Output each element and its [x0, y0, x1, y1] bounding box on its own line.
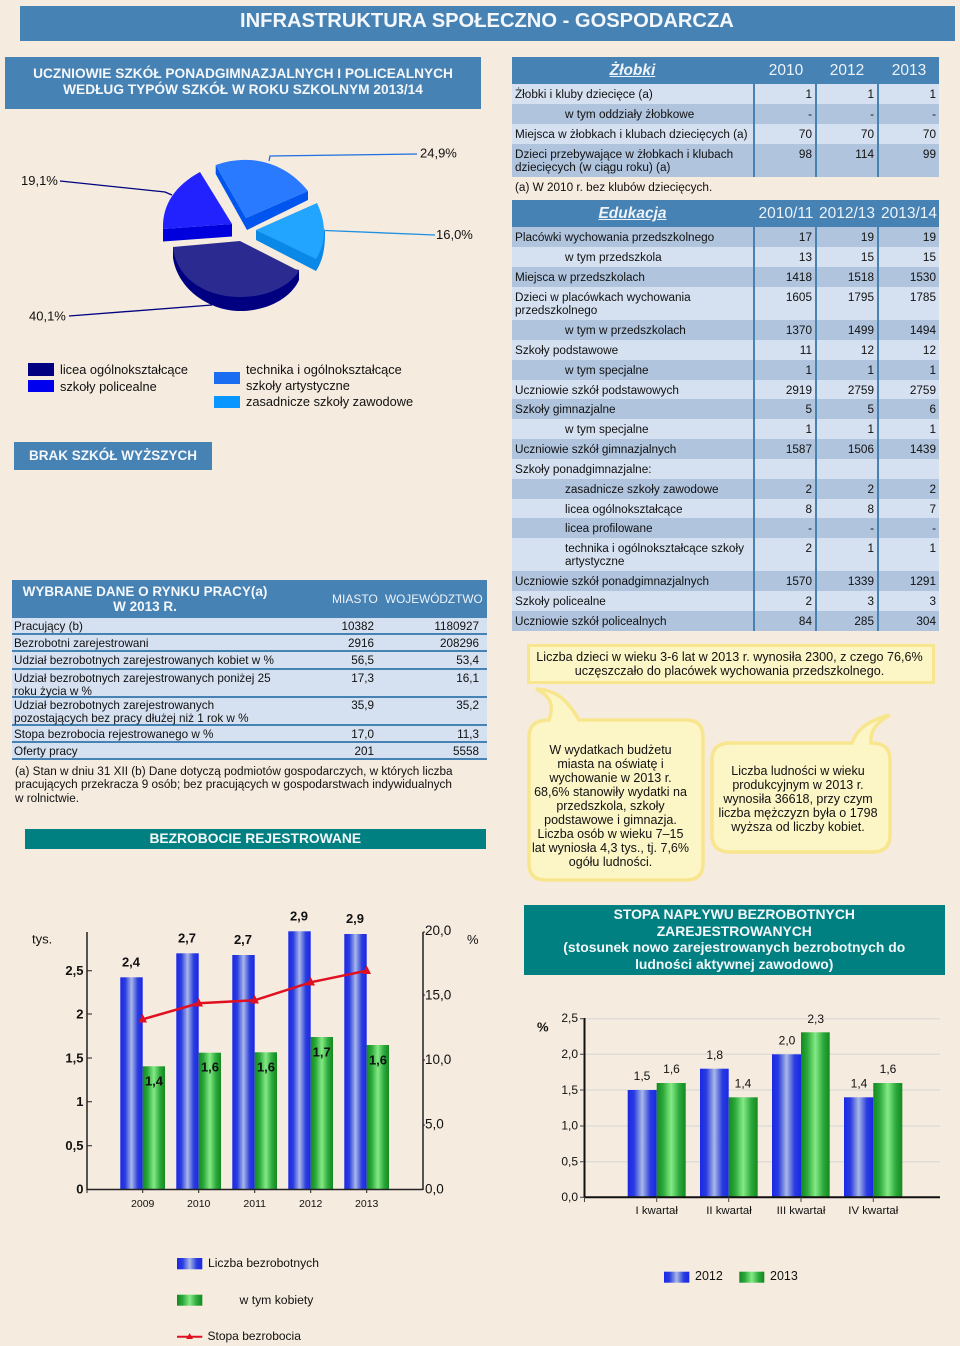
slice: zasadnicze 16,0% [256, 203, 473, 271]
table: education: 2 [805, 595, 812, 608]
left axis labels [65, 963, 84, 1196]
axis labels: 2,5 [561, 1011, 578, 1025]
data labels: 2,9 [290, 908, 308, 924]
footnote: nurseries: (a) W 2010 r. bez klubów dziecięcych. [515, 181, 712, 194]
table: education: 3 [867, 595, 874, 608]
table: education: 1339 [848, 575, 874, 588]
heading: students by school type [5, 57, 481, 109]
callout: education budget: wychowanie w 2013 r. [549, 771, 672, 785]
bars: of which women [143, 1037, 389, 1190]
table: nurseries: Dzieci przebywające w żłobkach i klubach dziecięcych (w ciągu roku) (a) [515, 148, 733, 174]
table: nurseries: 98 [799, 148, 812, 161]
table: labour market data: 11,3 [457, 728, 479, 741]
table: labour market data: 35,9 [351, 699, 374, 712]
table: education: Szkoły podstawowe [515, 344, 618, 357]
table: education: 1587 [786, 443, 812, 456]
table: education: 1499 [848, 324, 874, 337]
table: education: 1494 [910, 324, 936, 337]
table header: 2012/13 [819, 205, 875, 222]
table: education: - [932, 522, 936, 535]
data labels: 1,6 [663, 1062, 680, 1076]
axis labels: 0,0 [561, 1190, 578, 1204]
slice: licea 40,1%: 40,1% [29, 308, 66, 324]
legend: school types: szkoły policealne [60, 379, 157, 394]
legend: 2012 and 2013 [664, 1269, 798, 1283]
table header: MIASTO [332, 592, 378, 606]
table: nurseries: 114 [855, 148, 874, 161]
legend: registered unemployment: w tym kobiety [238, 1293, 314, 1307]
table: education: 2 [805, 483, 812, 496]
table: labour market data [12, 580, 487, 760]
right axis labels: 10,0 [425, 1052, 451, 1067]
legend: school types: szkoły artystyczne [246, 378, 350, 393]
table: nurseries: 70 [861, 128, 874, 141]
table: education: 8 [867, 503, 874, 516]
table header [12, 580, 487, 618]
table: education: 1 [929, 542, 936, 555]
data labels: 1,6 [201, 1060, 219, 1074]
table: nurseries: - [932, 108, 936, 121]
callout: working-age population: liczba mężczyzn była o 1798 [718, 806, 878, 820]
table: labour market data: 201 [354, 745, 374, 758]
quarter labels [635, 1205, 899, 1217]
quarter labels: I kwartał [635, 1205, 678, 1217]
data labels [634, 1012, 897, 1090]
chart: unemployment inflow rate [537, 1011, 940, 1217]
table header [512, 200, 939, 227]
table: education: Szkoły gimnazjalne [515, 403, 616, 416]
quarter labels: III kwartał [777, 1205, 826, 1217]
right axis labels [425, 923, 451, 1196]
slice: licea 40,1% [29, 241, 299, 324]
data labels: 1,7 [313, 1044, 331, 1060]
data labels: 1,6 [257, 1060, 275, 1074]
table: education: 285 [854, 615, 874, 628]
table header: 2013/14 [881, 205, 937, 222]
table: labour market data: 16,1 [456, 672, 479, 685]
table: education: Szkoły ponadgimnazjalne: [515, 463, 652, 476]
bars: 2012 [628, 1054, 873, 1197]
table: labour market data: Bezrobotni zarejestrowani [14, 637, 148, 650]
table: education: 15 [861, 251, 874, 264]
pie chart: students by school type [21, 146, 473, 324]
table: education: 1 [929, 423, 936, 436]
axis unit: % [537, 1020, 549, 1034]
table: education: licea ogólnokształcące [565, 503, 683, 516]
left axis labels: 0 [76, 1182, 84, 1196]
table: education: 11 [800, 344, 812, 357]
table: education: w tym w przedszkolach [565, 324, 686, 337]
table: education: 2 [805, 542, 812, 555]
data labels [122, 908, 387, 1088]
axes [87, 932, 425, 1193]
table: education: 19 [861, 231, 874, 244]
legend: school types: zasadnicze szkoły zawodowe [246, 394, 413, 409]
table: labour market data: 53,4 [456, 654, 479, 667]
callout: children aged 3-6: Liczba dzieci w wieku 3-6 lat w 2013 r. wynosiła 2300, z czego 76,6% [536, 650, 923, 664]
data labels: 1,5 [634, 1069, 651, 1083]
legend: school types: technika i ogólnokształcące [246, 362, 402, 377]
legend: 2012 and 2013: 2013 [770, 1269, 798, 1283]
axis labels: 1,5 [561, 1083, 578, 1097]
data labels: 1,6 [369, 1052, 387, 1068]
table: education: 5 [867, 403, 874, 416]
table: labour market data: Udział bezrobotnych zarejestrowanych poniżej 25 roku życia w % [14, 672, 271, 698]
axis labels [561, 1011, 578, 1204]
table: education: 2919 [786, 384, 812, 397]
table: education: 1570 [786, 575, 812, 588]
table header: WOJEWÓDZTWO [385, 592, 483, 606]
left axis labels: 1 [76, 1094, 84, 1109]
footnote: labour market: w rolnictwie. [15, 792, 79, 805]
slice: technika 24,9%: 24,9% [420, 146, 457, 160]
year labels: 2011 [243, 1198, 266, 1210]
table: nurseries: w tym oddziały żłobkowe [565, 108, 694, 121]
data labels: 1,4 [145, 1074, 164, 1088]
table: labour market data: Oferty pracy [14, 745, 78, 758]
callout: working-age population: wyższa od liczby kobiet. [731, 820, 865, 834]
year labels [131, 1198, 379, 1210]
year labels: 2010 [187, 1198, 211, 1210]
table header: Edukacja [598, 205, 667, 222]
table: education: 1 [867, 423, 874, 436]
table: education: 2759 [910, 384, 936, 397]
callout: education budget [527, 687, 705, 882]
table: education: Miejsca w przedszkolach [515, 271, 645, 284]
left axis labels: 2,5 [65, 963, 84, 978]
slice: szkoły policealne 19,1%: 19,1% [21, 173, 58, 188]
callout: working-age population: produkcyjnym w 2013 r. [732, 778, 864, 792]
line: unemployment rate [138, 966, 371, 1022]
table: education: 1795 [848, 291, 874, 304]
heading: no higher education [14, 442, 212, 470]
left axis labels: 0,5 [65, 1138, 84, 1153]
callout: working-age population: Liczba ludności w wieku [731, 764, 865, 778]
quarter labels: IV kwartał [848, 1205, 899, 1217]
table: education: Uczniowie szkół podstawowych [515, 384, 679, 397]
heading: unemployment inflow rate: ludności aktywnej zawodowo) [635, 956, 833, 972]
table: education: 1370 [786, 324, 812, 337]
heading: unemployment inflow rate [524, 905, 945, 974]
data labels: 1,4 [735, 1076, 752, 1090]
table: education: 3 [929, 595, 936, 608]
callout: children aged 3-6 [527, 644, 935, 684]
table header: 2013 [892, 62, 926, 79]
right axis labels: 15,0 [425, 988, 451, 1002]
table: labour market data: 5558 [453, 745, 479, 758]
footnote: labour market: pracujących przekracza 9 osób; bez pracujących w gospodarstwach indywidualnych [15, 778, 452, 791]
axis units: tys. [32, 932, 52, 946]
table: nurseries: - [808, 108, 812, 121]
quarter labels: II kwartał [706, 1205, 752, 1217]
table: education: 19 [923, 231, 936, 244]
table: education: 304 [916, 615, 936, 628]
table: labour market data: 208296 [440, 637, 479, 650]
year labels: 2013 [355, 1198, 379, 1210]
table: education: 1605 [786, 291, 812, 304]
legend: registered unemployment [177, 1256, 319, 1343]
table: education: 2759 [848, 384, 874, 397]
left axis labels: 2 [76, 1006, 84, 1022]
table: labour market data: 1180927 [434, 620, 479, 633]
right axis labels: 5,0 [425, 1116, 444, 1132]
table: education: 2 [929, 483, 936, 496]
table: education: 1530 [910, 271, 936, 284]
table: education [512, 200, 939, 631]
callout: education budget: Liczba osób w wieku 7–15 [538, 827, 683, 841]
title [20, 6, 955, 41]
table: nurseries: 1 [805, 88, 812, 101]
table: education: w tym przedszkola [565, 251, 662, 264]
table: nurseries: - [870, 108, 874, 121]
table: labour market data: Udział bezrobotnych zarejestrowanych pozostających bez pracy dłużej niż 1 rok w % [14, 699, 249, 725]
legend: 2012 and 2013: 2012 [695, 1269, 723, 1283]
axes [584, 1018, 940, 1198]
data labels: 2,7 [234, 932, 252, 947]
table: nurseries: 70 [799, 128, 812, 141]
table: education: 1 [805, 364, 812, 377]
data labels: 1,4 [851, 1076, 868, 1090]
table: education: 17 [799, 231, 812, 244]
table: education: 6 [929, 403, 936, 416]
table: education: 15 [923, 251, 936, 264]
table: labour market data: 17,3 [351, 672, 374, 685]
table: education: 1 [867, 542, 874, 555]
table header: Żłobki [610, 62, 655, 79]
table header: W 2013 R. [113, 599, 177, 614]
callout: education budget: podstawowe i gimnazja. [544, 813, 677, 827]
table: education: 7 [929, 503, 936, 516]
table: education: 1 [929, 364, 936, 377]
slice: technika 24,9% [216, 146, 457, 230]
table: education: Uczniowie szkół gimnazjalnych [515, 443, 676, 456]
table header: 2010 [769, 62, 803, 79]
axis units [32, 932, 479, 947]
table: education: Dzieci w placówkach wychowania przedszkolnego [515, 291, 691, 317]
table: labour market data: 10382 [341, 620, 374, 633]
heading: registered unemployment: BEZROBOCIE REJESTROWANE [149, 831, 361, 846]
data labels: 2,9 [346, 911, 364, 926]
table: education: 1518 [848, 271, 874, 284]
table: education: 12 [923, 344, 936, 357]
right axis labels: 0,0 [425, 1182, 444, 1196]
table: education: 1506 [848, 443, 874, 456]
year labels: 2012 [299, 1198, 323, 1210]
table: education: - [808, 522, 812, 535]
heading: unemployment inflow rate: (stosunek nowo zarejestrowanych bezrobotnych do [563, 939, 905, 955]
title: INFRASTRUKTURA SPOŁECZNO - GOSPODARCZA [240, 10, 734, 32]
callout: education budget: przedszkola, szkoły [556, 799, 665, 813]
table: education: 2 [867, 483, 874, 496]
data labels: 2,4 [122, 954, 141, 970]
table: labour market data: 56,5 [351, 654, 374, 667]
callout: children aged 3-6: uczęszczało do placówek wychowania przedszkolnego. [575, 664, 884, 678]
table header: WYBRANE DANE O RYNKU PRACY(a) [23, 584, 267, 599]
axis labels: 1,0 [561, 1118, 578, 1132]
table: education: w tym specjalne [565, 423, 649, 436]
table: education: 1291 [910, 575, 936, 588]
data labels: 2,0 [779, 1034, 796, 1048]
callout: working-age population [710, 713, 892, 854]
callout: education budget: W wydatkach budżetu [549, 743, 672, 757]
legend: school types [28, 362, 413, 409]
table: education: Uczniowie szkół ponadgimnazjalnych [515, 575, 709, 588]
table: education: 8 [805, 503, 812, 516]
table: nurseries: 99 [923, 148, 936, 161]
table: education: - [870, 522, 874, 535]
heading: unemployment inflow rate: ZAREJESTROWANYCH [657, 922, 812, 938]
table: nurseries: 1 [929, 88, 936, 101]
table: nurseries: 1 [867, 88, 874, 101]
table header [512, 57, 939, 84]
table: labour market data: 2916 [348, 637, 374, 650]
axis labels: 2,0 [561, 1047, 578, 1061]
table: labour market data: 35,2 [456, 699, 479, 712]
slice: szkoły policealne 19,1% [21, 172, 232, 242]
legend: registered unemployment: Liczba bezrobotnych [208, 1256, 319, 1270]
table: nurseries: Żłobki i kluby dziecięce (a) [515, 88, 653, 101]
heading: students by school type: WEDŁUG TYPÓW SZKÓŁ W ROKU SZKOLNYM 2013/14 [63, 82, 423, 97]
table: education: 12 [861, 344, 874, 357]
footnote: labour market: (a) Stan w dniu 31 XII (b) Dane dotyczą podmiotów gospodarczych, w których liczba [15, 765, 453, 778]
footnote: labour market [15, 765, 453, 805]
axis units: % [467, 932, 479, 947]
table: education: 1785 [910, 291, 936, 304]
axis labels: 0,5 [561, 1154, 578, 1168]
table header: 2012 [830, 62, 864, 79]
data labels: 2,7 [178, 930, 196, 946]
data labels: 1,6 [880, 1062, 897, 1076]
right axis labels: 20,0 [425, 923, 451, 938]
table header: 2010/11 [759, 205, 813, 222]
legend: registered unemployment: Stopa bezrobocia [208, 1329, 301, 1343]
bars: 2013 [657, 1032, 902, 1197]
table: education: w tym specjalne [565, 364, 649, 377]
table: labour market data: 17,0 [351, 728, 374, 741]
table: nurseries [512, 57, 939, 177]
table: education: licea profilowane [565, 522, 653, 535]
year labels: 2009 [131, 1198, 155, 1210]
bars: number of unemployed [120, 931, 367, 1190]
heading: students by school type: UCZNIOWIE SZKÓŁ PONADGIMNAZJALNYCH I POLICEALNYCH [33, 66, 453, 80]
table: education: 1439 [910, 443, 936, 456]
table: education: 13 [799, 251, 812, 264]
table: education: 5 [805, 403, 812, 416]
table: education: 1 [867, 364, 874, 377]
table: education: technika i ogólnokształcące szkoły artystyczne [565, 542, 744, 568]
table: education: Uczniowie szkół policealnych [515, 615, 667, 628]
data labels: 1,8 [706, 1048, 723, 1062]
callout: working-age population: wynosiła 36618, przy czym [723, 792, 873, 806]
data labels: 2,3 [807, 1012, 824, 1026]
table: education: 1418 [786, 271, 812, 284]
table: labour market data: Udział bezrobotnych zarejestrowanych kobiet w % [14, 654, 274, 667]
table: education: Placówki wychowania przedszkolnego [515, 231, 714, 244]
slice: zasadnicze 16,0%: 16,0% [436, 227, 473, 242]
table: labour market data: Pracujący (b) [14, 620, 83, 633]
table: education: 84 [799, 615, 812, 628]
table: nurseries: Miejsca w żłobkach i klubach dziecięcych (a) [515, 128, 747, 141]
heading: unemployment inflow rate: STOPA NAPŁYWU BEZROBOTNYCH [614, 906, 855, 922]
callout: education budget: 68,6% stanowiły wydatki na [534, 785, 687, 799]
table: nurseries: 70 [923, 128, 936, 141]
table: education: zasadnicze szkoły zawodowe [565, 483, 718, 496]
heading: no higher education: BRAK SZKÓŁ WYŻSZYCH [29, 448, 197, 463]
table: education: 1 [805, 423, 812, 436]
callout: education budget: ogółu ludności. [569, 855, 652, 869]
table: education: Szkoły policealne [515, 595, 606, 608]
callout: education budget: lat wyniosła 4,3 tys., tj. 7,6% [532, 841, 689, 855]
legend: school types: licea ogólnokształcące [60, 362, 188, 377]
heading: registered unemployment [24, 829, 486, 849]
chart: registered unemployment [32, 908, 479, 1210]
callout: education budget: miasta na oświatę i [557, 757, 664, 771]
left axis labels: 1,5 [65, 1050, 84, 1066]
table: labour market data: Stopa bezrobocia rejestrowanego w % [14, 728, 213, 741]
